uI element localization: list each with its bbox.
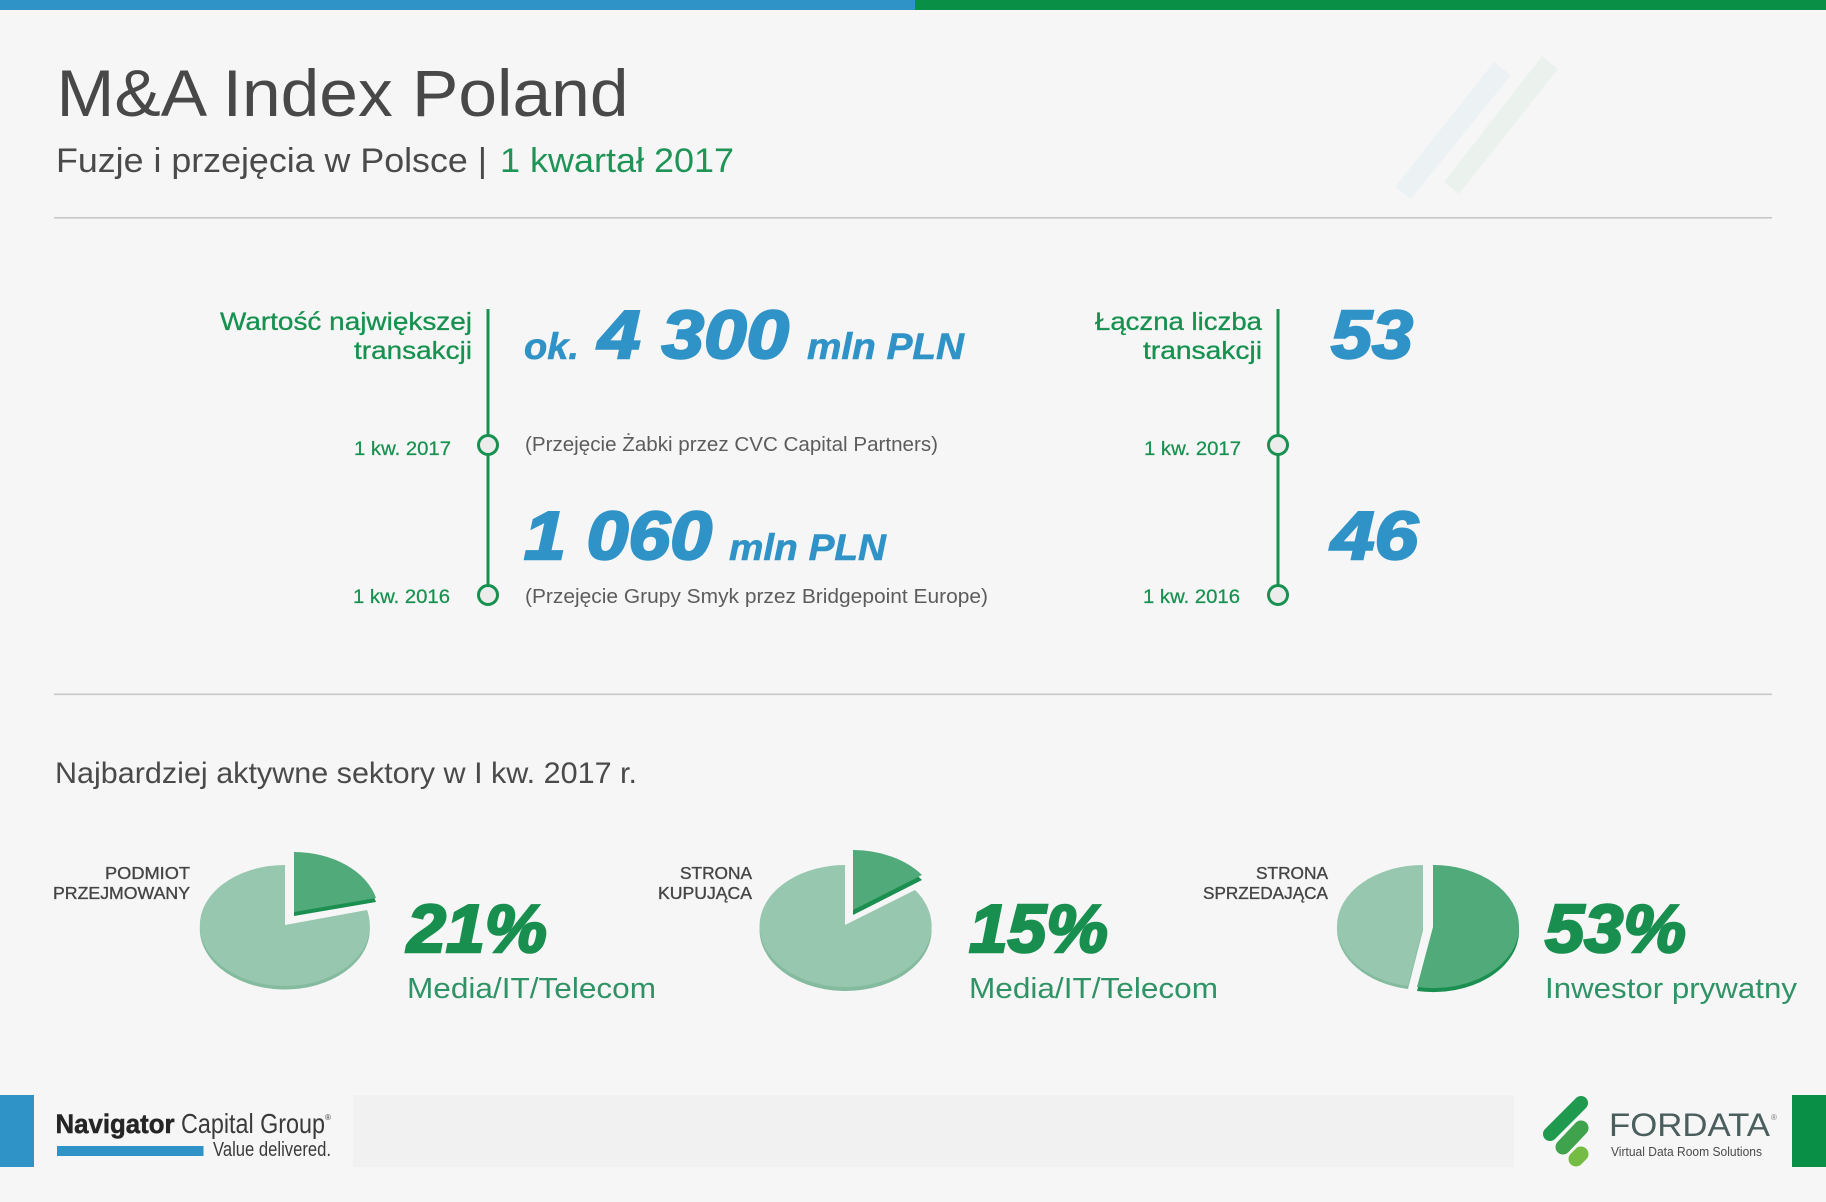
value 46: 46 (1329, 498, 1419, 574)
panel: selling side (1203, 863, 1798, 1005)
percentage: 53% (1545, 891, 1686, 967)
value 2017: 4 300 (596, 297, 789, 373)
heading: largest transaction: transakcji (354, 337, 472, 365)
subtitle: 1 kwartał 2017 (500, 142, 734, 180)
date label 2016: 1 kw. 2016 (1143, 586, 1240, 608)
logo: Navigator Capital Group (56, 1108, 331, 1161)
value 2017 (524, 297, 965, 373)
timeline (1268, 309, 1288, 604)
top colour bar (0, 0, 1826, 10)
subtitle: Fuzje i przejęcia w Polsce | (56, 142, 487, 180)
icon: fordata stripes (1550, 1103, 1581, 1159)
label: KUPUJĄCA (658, 883, 752, 903)
logo: FORDATA: Virtual Data Room Solutions (1611, 1145, 1762, 1159)
label: STRONA (680, 863, 752, 883)
value 2017: mln PLN (807, 326, 965, 367)
decorative stripes (1395, 56, 1558, 199)
heading: total transactions: transakcji (1143, 337, 1262, 365)
value 53: 53 (1331, 297, 1413, 373)
panel: buying side (658, 850, 1218, 1005)
date label 2017: 1 kw. 2017 (1144, 438, 1241, 460)
sector: Media/IT/Telecom (407, 973, 656, 1005)
label: SPRZEDAJĄCA (1203, 883, 1328, 903)
value 2016 (524, 498, 887, 574)
label: STRONA (1256, 863, 1328, 883)
note 2016: (Przejęcie Grupy Smyk przez Bridgepoint Europe) (525, 586, 988, 608)
subtitle (56, 142, 734, 180)
date label 2017: 1 kw. 2017 (354, 438, 451, 460)
label (1203, 863, 1328, 903)
sector: Inwestor prywatny (1545, 973, 1798, 1005)
pie chart 53% (1337, 865, 1519, 992)
logo: Navigator Capital Group: Value delivered. (213, 1139, 331, 1161)
pie chart 21% (200, 852, 376, 989)
panel: acquired entity (53, 852, 656, 1005)
panel: total number of transactions (1095, 297, 1419, 608)
percentage: 21% (405, 891, 547, 967)
logo: FORDATA: FORDATA (1609, 1107, 1771, 1143)
heading: largest transaction (220, 308, 472, 365)
sector: Media/IT/Telecom (969, 973, 1218, 1005)
label (658, 863, 752, 903)
heading: total transactions (1095, 308, 1262, 365)
label: PODMIOT (105, 863, 190, 883)
value 2016: 1 060 (524, 498, 712, 574)
label: PRZEJMOWANY (53, 883, 190, 903)
heading: total transactions: Łączna liczba (1095, 308, 1262, 336)
logo: FORDATA (1550, 1103, 1777, 1159)
value 2016: mln PLN (729, 527, 887, 568)
pie chart 15% (760, 850, 932, 991)
panel: largest transaction value (220, 297, 988, 608)
logo: Navigator Capital Group: ® (325, 1113, 331, 1122)
timeline (478, 309, 498, 604)
date label 2016: 1 kw. 2016 (353, 586, 450, 608)
logo: Navigator Capital Group: Capital Group (181, 1108, 325, 1139)
heading: largest transaction: Wartość największej (220, 308, 472, 336)
section heading: Najbardziej aktywne sektory w I kw. 2017 r. (55, 757, 637, 790)
value 2017: ok. (524, 326, 579, 367)
footer (0, 1095, 1826, 1167)
label (53, 863, 190, 903)
logo: FORDATA: ® (1771, 1113, 1777, 1122)
logo: Navigator Capital Group: Navigator (56, 1109, 175, 1139)
percentage: 15% (969, 891, 1108, 967)
note 2017: (Przejęcie Żabki przez CVC Capital Partners) (525, 433, 938, 456)
title: M&A Index Poland (56, 56, 628, 130)
